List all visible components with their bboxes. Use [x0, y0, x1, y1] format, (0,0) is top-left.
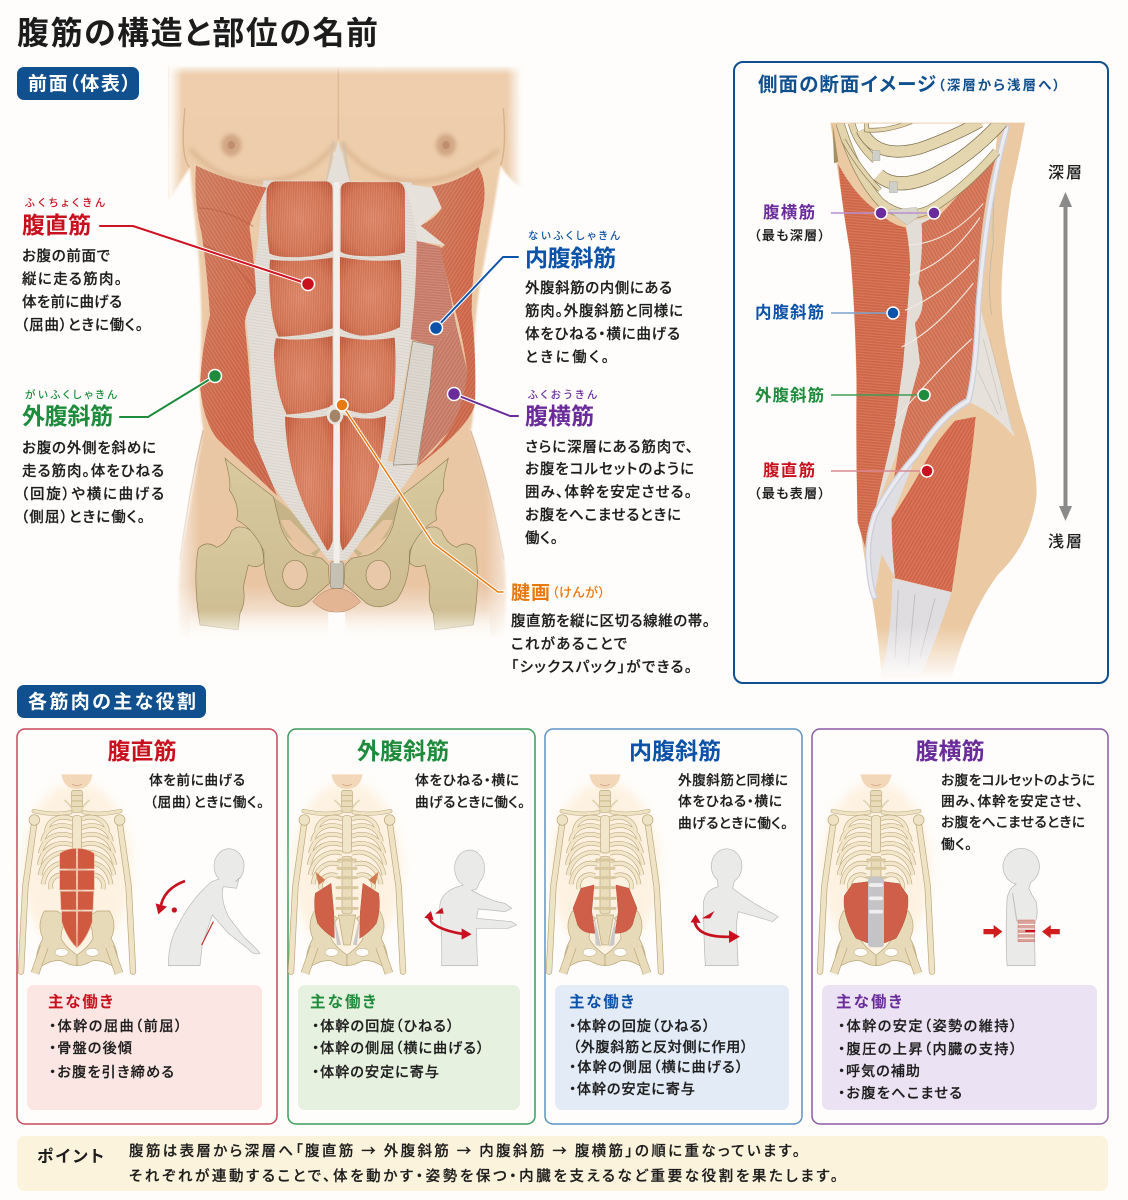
callout: external oblique: （側屈）ときに働く。: [21, 509, 145, 526]
panel: transversus card: [812, 729, 1108, 1124]
main functions box: ・呼気の補助: [838, 1064, 920, 1080]
person side view: [983, 848, 1060, 966]
title: 腹筋の構造と部位の名前: [17, 15, 378, 51]
main functions box: 主な働き: [48, 993, 113, 1011]
tendon below muscle: [882, 578, 952, 674]
depth arrow: 浅層: [1048, 533, 1082, 551]
description: （屈曲）ときに働く。: [150, 795, 264, 810]
main functions box: 主な働き: [310, 993, 376, 1011]
leader: tendinous intersection: [336, 399, 503, 592]
main functions box: （外腹斜筋と反対側に作用）: [573, 1039, 748, 1056]
side labels: transversus: [754, 202, 940, 243]
navel: [327, 404, 343, 425]
callout: transversus abdominis: お腹をコルセットのように: [525, 461, 694, 478]
callout: rectus abdominis: [21, 197, 143, 334]
main functions box: ・お腹をへこませる: [838, 1085, 962, 1102]
depth arrow: [1048, 164, 1082, 551]
callout: external oblique: [21, 388, 164, 526]
main functions box: [555, 985, 789, 1110]
panel: side cross-section: [734, 62, 1108, 683]
panel heading: [758, 74, 1060, 96]
pill: front view: 前面（体表）: [28, 73, 131, 95]
abdominal aponeurosis sheath: [246, 141, 422, 563]
callout: rectus abdominis: 腹直筋: [22, 212, 91, 238]
callout: tendinous intersection: 腹直筋を縦に区切る線維の帯。: [511, 613, 710, 630]
main functions box: ・体幹の屈曲（前屈）: [49, 1018, 182, 1035]
main functions box: [27, 985, 262, 1110]
callout: rectus abdominis: 体を前に曲げる: [22, 294, 122, 311]
main functions box: ・体幹の安定に寄与: [569, 1082, 695, 1098]
callout: transversus abdominis: 働く。: [525, 530, 558, 547]
callout: tendinous intersection: [511, 582, 710, 676]
description: 体をひねる・横に: [415, 772, 519, 788]
callout: external oblique: お腹の外側を斜めに: [22, 440, 156, 457]
main functions box: 主な働き: [569, 993, 634, 1011]
card heading: 腹横筋: [916, 738, 984, 764]
main functions box: ・体幹の安定に寄与: [312, 1065, 439, 1081]
point callout: [17, 1136, 1108, 1191]
callout: rectus abdominis: （屈曲）ときに働く。: [21, 317, 143, 334]
callout: transversus abdominis: お腹をへこませるときに: [525, 507, 681, 524]
side labels: internal oblique: 内腹斜筋: [755, 302, 824, 322]
point callout: ポイント: [37, 1146, 104, 1166]
pill: front view: [17, 67, 139, 100]
panel heading: （深層から浅層へ）: [938, 77, 1060, 93]
pill: roles heading: 各筋肉の主な役割: [28, 690, 196, 713]
description: お腹をへこませるときに: [941, 814, 1085, 830]
external oblique muscle right: [405, 167, 485, 467]
transversus abdominis exposed: [418, 327, 467, 464]
callout: internal oblique: 内腹斜筋: [525, 245, 616, 271]
main functions box: 主な働き: [836, 993, 902, 1011]
callout: rectus abdominis: 縦に走る筋肉。: [22, 271, 122, 288]
callout: tendinous intersection: これがあることで: [511, 635, 627, 653]
callout: transversus abdominis: [525, 389, 694, 547]
callout: tendinous intersection: （けんが）: [552, 585, 605, 600]
callout: external oblique: 走る筋肉。体をひねる: [22, 463, 164, 480]
main functions box: ・体幹の側屈（横に曲げる）: [569, 1059, 743, 1076]
callout: transversus abdominis: ふくおうきん: [527, 389, 597, 401]
description: 働く。: [941, 837, 972, 852]
description: [941, 772, 1095, 852]
callout: internal oblique: 体をひねる・横に曲げる: [525, 326, 680, 343]
skeleton with transversus: [820, 774, 932, 973]
side view anatomical illustration: [828, 120, 1042, 680]
callout: rectus abdominis: お腹の前面で: [22, 248, 110, 265]
depth arrow: 深層: [1048, 164, 1082, 182]
side labels: transversus: 腹横筋: [763, 202, 815, 222]
card heading: 内腹斜筋: [629, 738, 721, 764]
leader: rectus abdominis: [100, 226, 314, 290]
callout: transversus abdominis: 囲み、体幹を安定させる。: [525, 484, 692, 501]
fascia band: [865, 128, 1007, 596]
description: 囲み、体幹を安定させ、: [941, 794, 1083, 809]
rectus abdominis blocks: [266, 181, 405, 551]
internal oblique side: [838, 164, 910, 552]
panel: rectus card: [17, 729, 277, 1124]
card heading: 外腹斜筋: [357, 738, 449, 764]
main functions box: ・骨盤の後傾: [49, 1041, 132, 1057]
callout: tendinous intersection: 腱画: [511, 582, 550, 604]
side labels: external oblique: [755, 385, 930, 405]
side labels: rectus: 腹直筋: [763, 460, 815, 480]
pelvis bones: [190, 458, 490, 641]
description: 体をひねる・横に: [678, 793, 782, 809]
pill: roles heading: [17, 685, 206, 718]
side labels: rectus: [754, 460, 933, 501]
callout: tendinous intersection: 「シックスパック」ができる。: [511, 658, 692, 676]
description: 曲げるときに働く。: [678, 816, 788, 831]
person twisting: [690, 849, 778, 966]
external oblique side: [875, 158, 996, 510]
leader: transversus abdominis: [448, 388, 518, 416]
skeleton with external oblique: [291, 774, 403, 973]
callout: rectus abdominis: ふくちょくきん: [24, 197, 105, 209]
main functions box: ・腹圧の上昇（内臓の支持）: [838, 1041, 1017, 1058]
leader: internal oblique: [430, 257, 518, 334]
internal oblique exposed: [411, 241, 457, 346]
callout: internal oblique: [525, 230, 683, 366]
main functions box: [822, 985, 1097, 1110]
main functions box: ・お腹を引き締める: [49, 1064, 174, 1081]
panel: external oblique card: [288, 729, 535, 1124]
main functions box: ・体幹の安定（姿勢の維持）: [838, 1019, 1017, 1035]
side skin: [830, 120, 1037, 678]
panel heading: 側面の断面イメージ: [758, 74, 936, 96]
leader lines and dots: [100, 226, 518, 592]
main functions box: ・体幹の回旋（ひねる）: [312, 1019, 454, 1035]
rib cage: [833, 122, 1002, 225]
skeleton with rectus: [21, 774, 133, 973]
callout: external oblique: がいふくしゃきん: [25, 388, 117, 401]
point callout: 腹筋は表層から深層へ「腹直筋 → 外腹斜筋 → 内腹斜筋 → 腹横筋」の順に重なっています。: [129, 1140, 800, 1161]
callout: internal oblique: ないふくしゃきん: [528, 230, 620, 242]
description: [415, 772, 525, 810]
main functions box: ・体幹の回旋（ひねる）: [569, 1019, 710, 1035]
side labels: external oblique: 外腹斜筋: [755, 385, 824, 405]
callout: internal oblique: 筋肉。外腹斜筋と同様に: [525, 303, 683, 320]
rectus lower muscle side: [892, 417, 976, 592]
person bending forward: [156, 849, 260, 966]
description: [678, 772, 788, 831]
description: 外腹斜筋と同様に: [678, 772, 788, 788]
side labels: internal oblique: [755, 302, 899, 322]
callout: external oblique: （回旋）や横に曲げる: [21, 486, 164, 503]
description: 曲げるときに働く。: [415, 795, 525, 810]
callout: external oblique: 外腹斜筋: [22, 403, 113, 429]
person twisting: [424, 850, 517, 966]
callout: internal oblique: 外腹斜筋の内側にある: [525, 280, 672, 297]
main functions box: [298, 985, 520, 1110]
description: お腹をコルセットのように: [941, 772, 1095, 788]
external oblique muscle left: [195, 165, 277, 496]
description: [149, 772, 264, 810]
side labels: rectus: （最も表層）: [754, 486, 825, 501]
callout: transversus abdominis: さらに深層にある筋肉で、: [525, 439, 693, 456]
side labels: transversus: （最も深層）: [754, 228, 825, 243]
callout: transversus abdominis: 腹横筋: [525, 403, 594, 429]
skin torso: [169, 64, 522, 641]
white fascia sheet: [393, 341, 434, 465]
skeleton with internal oblique: [549, 774, 661, 973]
panel: internal oblique card: [545, 729, 802, 1124]
card heading: 腹直筋: [108, 738, 176, 764]
main functions box: ・体幹の側屈（横に曲げる）: [312, 1040, 484, 1057]
description: 体を前に曲げる: [149, 772, 245, 788]
front view anatomical illustration: [169, 64, 522, 641]
leader: external oblique: [120, 370, 222, 417]
callout: internal oblique: ときに働く。: [525, 349, 609, 366]
fan tendon and wispy fascia: [970, 198, 1014, 436]
point callout: それぞれが連動することで、体を動かす・姿勢を保つ・内臓を支えるなど重要な役割を果たします。: [129, 1165, 838, 1186]
